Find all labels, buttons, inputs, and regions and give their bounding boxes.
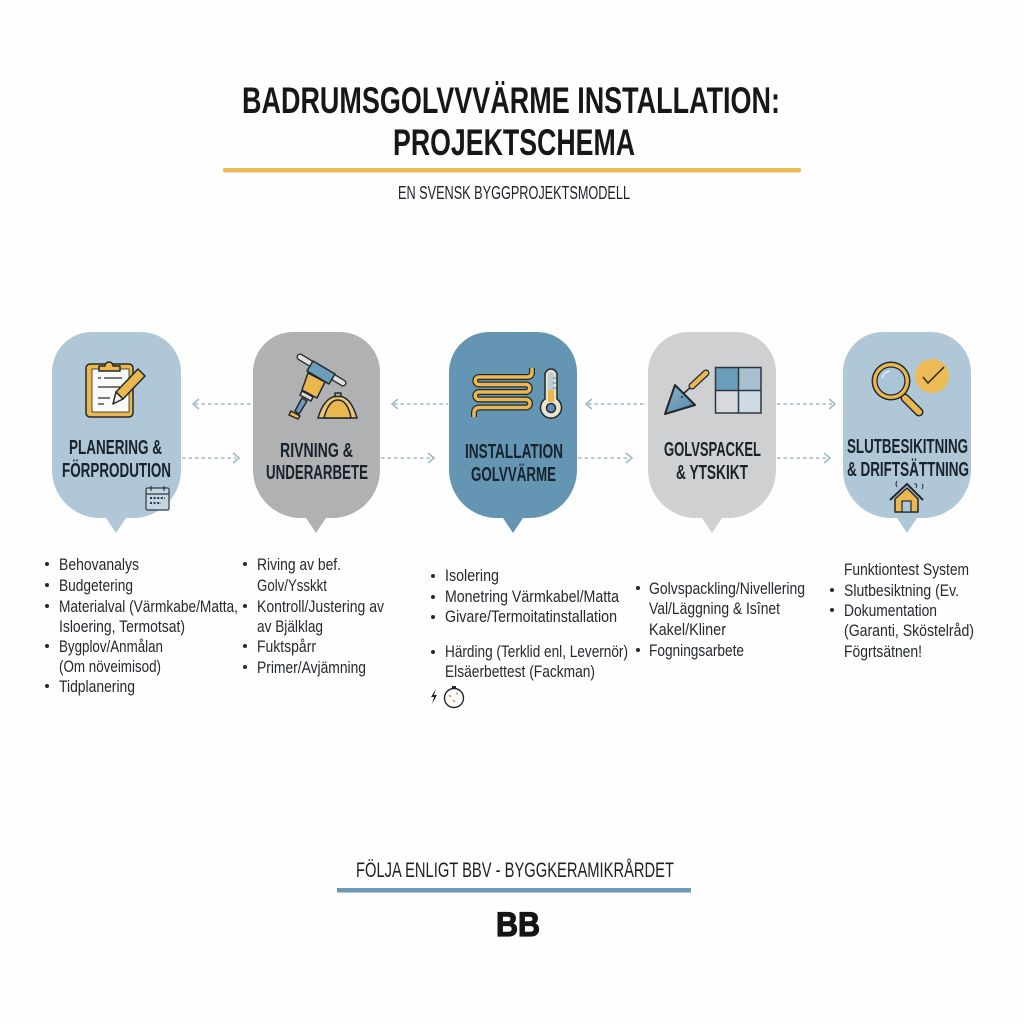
list: rivning: Fuktspårr bbox=[257, 638, 316, 656]
icon: stopwatch bbox=[444, 686, 464, 708]
icon: heating coil bbox=[474, 368, 532, 417]
list: rivning: Primer/Avjämning bbox=[257, 659, 366, 677]
list: golvspackel: Val/Läggning & Isînet bbox=[649, 600, 780, 618]
stage label bbox=[664, 439, 761, 484]
icon: thermometer bbox=[540, 369, 562, 418]
panel: golvspackel bbox=[648, 332, 776, 533]
arrows: top row bbox=[193, 399, 835, 409]
stage label: GOLVVÄRME bbox=[471, 463, 556, 486]
list: slutbesiktning: Funktiontest System bbox=[844, 561, 969, 579]
icon: check badge bbox=[915, 359, 949, 393]
arrows: bottom row bbox=[182, 453, 830, 463]
list: slutbesiktning: (Garanti, Sköstelråd) bbox=[844, 622, 974, 640]
list: installation: Isolering bbox=[445, 567, 499, 585]
stage label: UNDERARBETE bbox=[266, 462, 368, 484]
list: slutbesiktning: Fögrtsätnen! bbox=[844, 643, 922, 661]
list: slutbesiktning: Slutbesiktning (Ev. bbox=[844, 582, 959, 600]
list: planering: Behovanalys bbox=[59, 556, 139, 574]
icon: jackhammer and hard hat bbox=[289, 357, 357, 419]
panel: installation bbox=[449, 332, 577, 533]
icon: house bbox=[890, 481, 923, 512]
stage label: & YTSKIKT bbox=[676, 462, 748, 484]
stage label: INSTALLATION bbox=[465, 441, 563, 463]
stage label: RIVNING & bbox=[280, 440, 353, 462]
title: PROJEKTSCHEMA bbox=[393, 121, 635, 163]
panel shape bbox=[648, 332, 776, 533]
stage label: SLUTBESIKITNING bbox=[847, 436, 968, 458]
panel shape bbox=[843, 332, 971, 533]
stage label bbox=[62, 437, 171, 482]
list: planering: Materialval (Värmkabe/Matta, bbox=[59, 598, 238, 616]
footer underline bbox=[337, 888, 691, 892]
panel: planering bbox=[52, 332, 181, 533]
list: planering: Isloering, Termotsat) bbox=[59, 618, 185, 636]
list: rivning: av Bjälklag bbox=[257, 618, 323, 636]
icon: magnifying glass bbox=[872, 362, 919, 412]
list: golvspackel: Fogningsarbete bbox=[649, 642, 744, 660]
panel shape bbox=[449, 332, 577, 533]
list: planering: (Om növeimisod) bbox=[59, 658, 161, 676]
list: installation: Monetring Värmkabel/Matta bbox=[445, 588, 620, 606]
footer text: FÖLJA ENLIGT BBV - BYGGKERAMIKRÅRDET bbox=[356, 859, 674, 882]
stage label: & DRIFTSÄTTNING bbox=[847, 458, 969, 481]
list: installation: Härding (Terklid enl, Levernör) bbox=[445, 643, 628, 661]
list: slutbesiktning: Dokumentation bbox=[844, 602, 937, 620]
title underline bbox=[223, 168, 801, 172]
title bbox=[242, 79, 780, 163]
list: golvspackel: Golvspackling/Nivellering bbox=[649, 580, 805, 598]
list: rivning: Golv/Ysskkt bbox=[257, 577, 327, 595]
logo: BB: BB bbox=[496, 906, 540, 944]
list: installation: Givare/Termoitatinstallation bbox=[445, 608, 617, 626]
list: rivning bbox=[243, 556, 385, 677]
icon: lightning bolt bbox=[431, 689, 437, 704]
panel: slutbesiktning bbox=[843, 332, 971, 533]
icon: clipboard and pencil bbox=[86, 362, 145, 417]
panel: rivning bbox=[253, 332, 380, 533]
list: planering: Tidplanering bbox=[59, 678, 135, 696]
stage label: PLANERING & bbox=[69, 437, 162, 459]
list: golvspackel: Kakel/Kliner bbox=[649, 621, 726, 639]
icon: floor tiles bbox=[716, 368, 761, 413]
list: slutbesiktning bbox=[830, 561, 974, 661]
subtitle: EN SVENSK BYGGPROJEKTSMODELL bbox=[398, 183, 630, 203]
stage label bbox=[465, 441, 563, 486]
stage label: GOLVSPACKEL bbox=[664, 439, 761, 461]
icon: trowel bbox=[665, 373, 706, 414]
list: planering: Budgetering bbox=[59, 577, 133, 595]
list: installation bbox=[431, 567, 628, 681]
panel shape bbox=[253, 332, 380, 533]
stage label bbox=[266, 440, 368, 484]
panel shape bbox=[52, 332, 181, 533]
list: golvspackel bbox=[636, 580, 805, 660]
list: rivning: Kontroll/Justering av bbox=[257, 598, 385, 616]
title: BADRUMSGOLVVVÄRME INSTALLATION: bbox=[242, 79, 780, 121]
stage label bbox=[847, 436, 969, 481]
list: installation: Elsäerbettest (Fackman) bbox=[445, 663, 595, 681]
list: planering: Bygplov/Anmålan bbox=[59, 638, 163, 656]
list: planering bbox=[45, 556, 238, 696]
icon: calendar bbox=[146, 486, 169, 510]
list: rivning: Riving av bef. bbox=[257, 556, 341, 574]
stage label: FÖRPRODUTION bbox=[62, 459, 171, 482]
